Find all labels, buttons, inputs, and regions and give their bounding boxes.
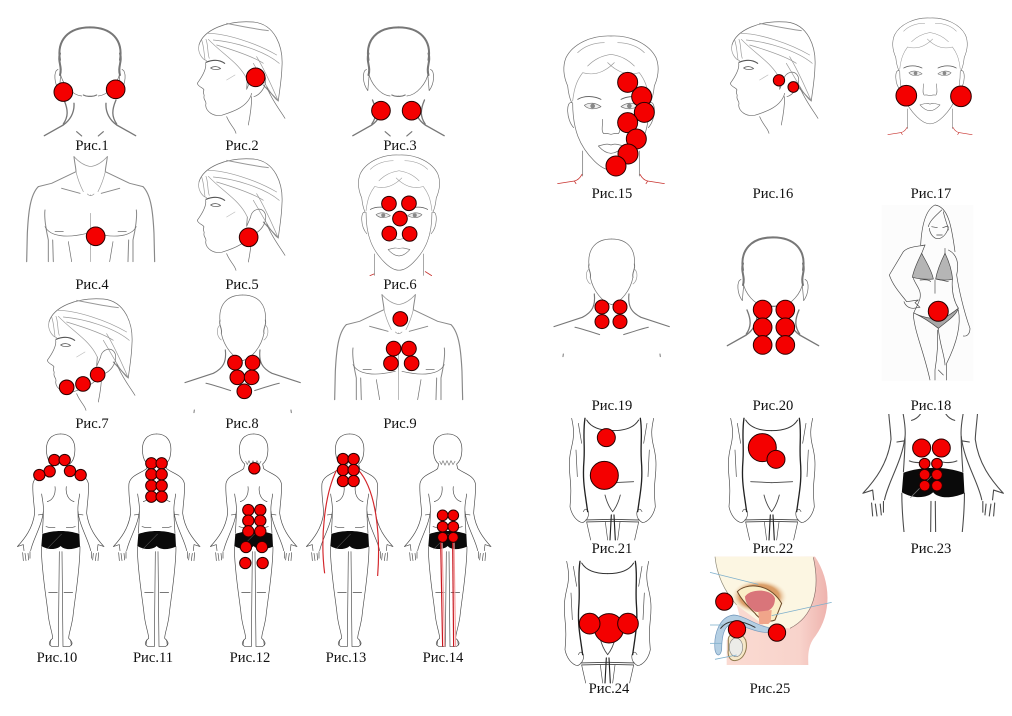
line drawing xyxy=(335,295,463,400)
pain point xyxy=(86,227,105,246)
pain points xyxy=(773,75,799,92)
caption: Рис.7 xyxy=(75,416,109,432)
figure 19: neck xyxy=(554,239,669,414)
caption: Рис.13 xyxy=(326,650,366,666)
line drawing xyxy=(727,237,819,346)
pain points xyxy=(337,453,359,487)
line drawing xyxy=(185,295,300,413)
line drawing xyxy=(564,561,651,683)
pain points xyxy=(913,439,950,491)
pain point xyxy=(928,301,948,321)
figure 18: woman in bikini xyxy=(882,205,973,414)
figure 20: back of head xyxy=(727,237,819,414)
figure 1: back of head xyxy=(44,27,136,154)
figure 24: lower torso front xyxy=(564,561,651,697)
caption: Рис.11 xyxy=(133,650,173,666)
caption: Рис.15 xyxy=(592,186,632,202)
pain points xyxy=(753,300,795,354)
pain points xyxy=(748,434,785,468)
caption: Рис.20 xyxy=(753,398,793,414)
figure 25: pelvic anatomy xyxy=(710,557,832,697)
figure 11: full body back xyxy=(113,434,200,666)
figure 13: full body back with radiating lines xyxy=(306,434,393,666)
figure 7: side of head xyxy=(47,299,135,432)
line drawing xyxy=(888,18,972,135)
pain points xyxy=(240,463,268,569)
line drawing xyxy=(569,418,656,540)
figure 3: back of head xyxy=(353,27,444,154)
caption: Рис.14 xyxy=(423,650,464,666)
pain points xyxy=(579,613,638,643)
pain points xyxy=(59,367,105,395)
pain points xyxy=(590,429,618,489)
figure 14: full body back with leg lines xyxy=(404,434,491,666)
pain points xyxy=(146,458,167,502)
caption: Рис.1 xyxy=(75,138,109,154)
caption: Рис.16 xyxy=(753,186,793,202)
caption: Рис.4 xyxy=(75,277,109,293)
figure 8: neck xyxy=(185,295,300,432)
figure 15: face xyxy=(558,36,664,202)
line drawing xyxy=(730,22,818,133)
line drawing xyxy=(306,434,393,647)
caption: Рис.8 xyxy=(225,416,259,432)
figure 17: face xyxy=(888,18,972,202)
line drawing xyxy=(197,159,285,270)
pain points xyxy=(606,72,654,176)
line drawing xyxy=(27,157,155,262)
line drawing xyxy=(862,414,1004,532)
pain points xyxy=(34,454,86,481)
pain point xyxy=(246,68,265,87)
caption: Рис.24 xyxy=(589,681,630,697)
figure 12: full body back xyxy=(210,434,297,666)
figure 10: full body back xyxy=(17,434,104,666)
caption: Рис.2 xyxy=(225,138,259,154)
pain points xyxy=(54,80,125,101)
caption: Рис.9 xyxy=(383,416,417,432)
line drawing xyxy=(554,239,669,357)
figure 6: face xyxy=(358,155,440,293)
pain points xyxy=(384,312,419,371)
caption: Рис.19 xyxy=(592,398,632,414)
caption: Рис.18 xyxy=(911,398,951,414)
figure 16: side of head xyxy=(730,22,818,202)
caption: Рис.6 xyxy=(383,277,417,293)
anatomy illustration xyxy=(710,557,832,665)
pain points xyxy=(228,355,260,399)
pain points xyxy=(437,510,459,542)
line drawing xyxy=(113,434,200,647)
line drawing xyxy=(210,434,297,647)
caption: Рис.12 xyxy=(230,650,270,666)
pain points xyxy=(382,196,417,241)
caption: Рис.5 xyxy=(225,277,259,293)
figure 2: side of head xyxy=(197,22,285,154)
line drawing xyxy=(358,155,440,276)
pain points xyxy=(595,300,627,329)
line drawing xyxy=(353,27,444,136)
caption: Рис.22 xyxy=(753,541,793,557)
caption: Рис.3 xyxy=(383,138,417,154)
pain points xyxy=(716,593,786,641)
line drawing xyxy=(882,205,973,381)
line drawing xyxy=(558,36,664,184)
figure 9: chest and throat xyxy=(335,295,463,432)
line drawing xyxy=(47,299,135,410)
figure 23: lower back close-up xyxy=(862,414,1004,553)
pain points xyxy=(372,101,421,120)
line drawing xyxy=(197,22,285,133)
figure 21: lower torso front xyxy=(569,418,656,557)
pain points xyxy=(896,85,971,107)
figure 22: lower torso front xyxy=(728,418,815,557)
radiating pain lines xyxy=(441,540,456,647)
line drawing xyxy=(44,27,136,136)
caption: Рис.17 xyxy=(911,186,951,202)
figure 4: chest xyxy=(27,157,155,293)
caption: Рис.23 xyxy=(911,541,951,557)
line drawing xyxy=(17,434,104,647)
caption: Рис.25 xyxy=(750,681,790,697)
figure 5: side of head xyxy=(197,159,285,293)
pain point xyxy=(239,228,258,247)
radiating pain lines xyxy=(323,470,379,576)
line drawing xyxy=(728,418,815,540)
caption: Рис.10 xyxy=(37,650,77,666)
line drawing xyxy=(404,434,491,647)
caption: Рис.21 xyxy=(592,541,632,557)
